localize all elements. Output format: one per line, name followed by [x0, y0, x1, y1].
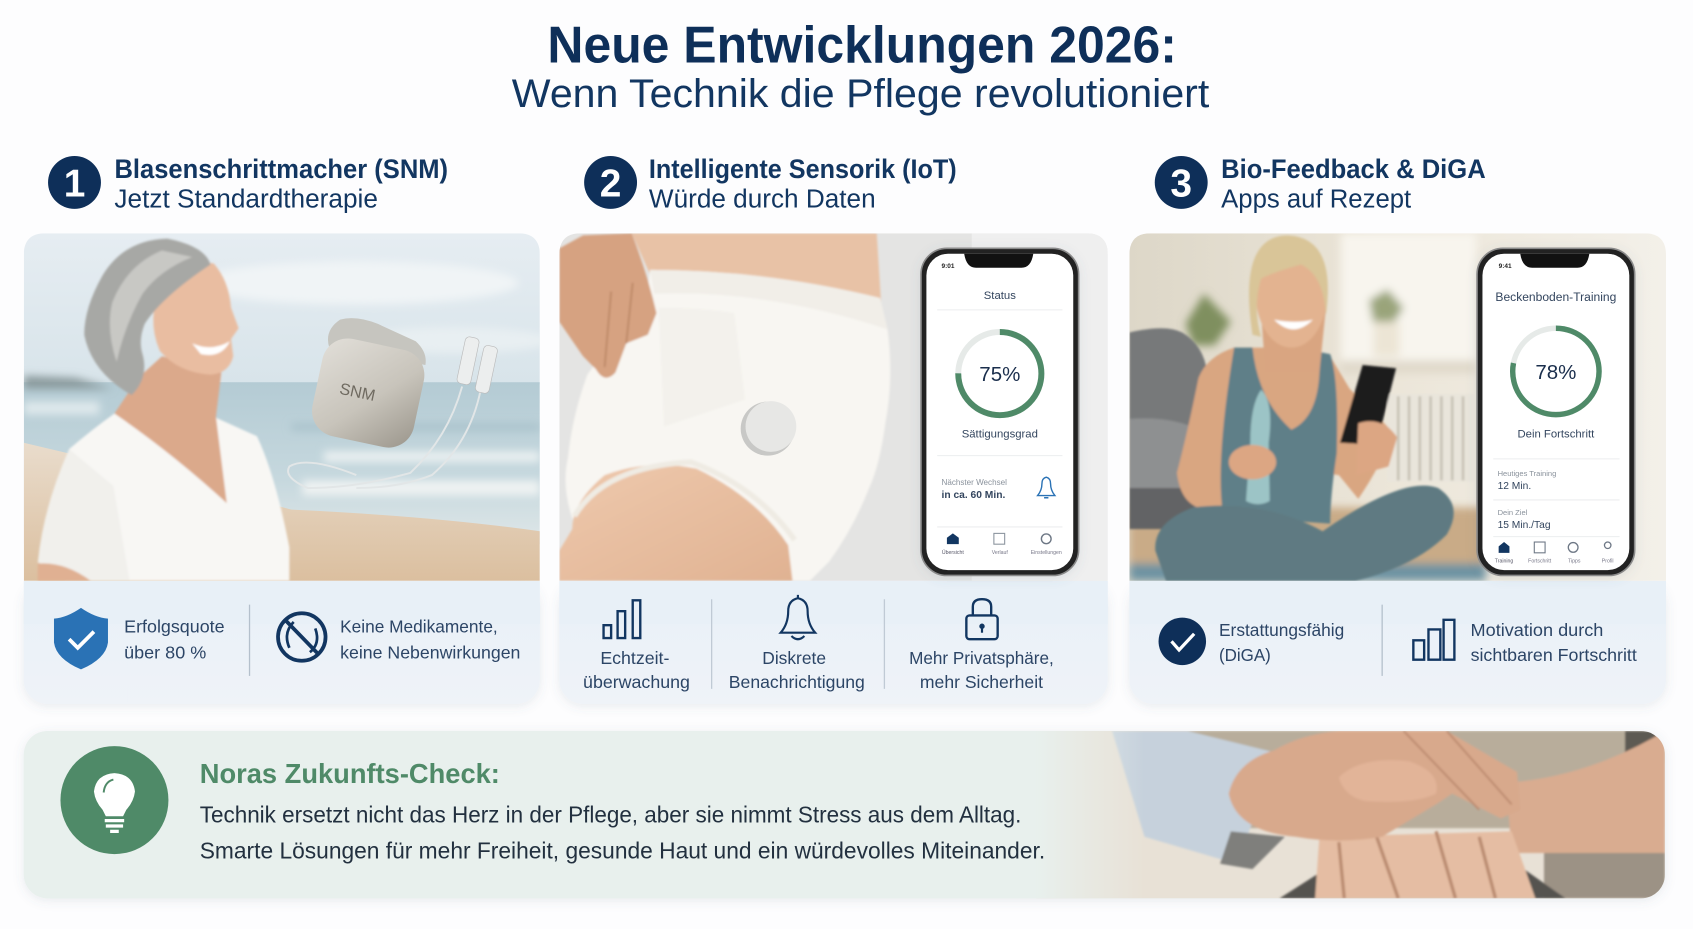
- feature: Benachrichtigung: Diskrete: [762, 648, 826, 668]
- feature: Erfolgsquote: Erfolgsquote: [124, 617, 225, 637]
- heading 3: Apps auf Rezept: [1221, 185, 1412, 213]
- title: Wenn Technik die Pflege revolutioniert: [512, 72, 1209, 116]
- panel: Noras Zukunfts-Check: [24, 731, 1665, 898]
- phone: Status: [921, 248, 1079, 575]
- number badge 1: [48, 156, 101, 209]
- photo: woman with biofeedback device and phone: [1129, 233, 1666, 581]
- phone: Status: Sättigungsgrad: [962, 428, 1038, 440]
- heading 2: Würde durch Daten: [649, 185, 876, 213]
- heading 1: Jetzt Standardtherapie: [114, 185, 378, 213]
- number badge 1: 1: [64, 163, 85, 206]
- heading 1: [114, 154, 448, 213]
- icon: light bulb: [60, 746, 168, 854]
- feature: Echtzeitüberwachung: überwachung: [583, 672, 690, 692]
- phone: Beckenboden-Training: Fortschritt: [1528, 559, 1552, 565]
- phone: Status: 9:01: [942, 263, 955, 270]
- feature: Privatsphäre: [909, 599, 1054, 692]
- feature: Erstattungsfähig: (DiGA): [1219, 645, 1271, 665]
- panel: Bio-Feedback & DiGA: [1129, 154, 1666, 704]
- phone: Beckenboden-Training: Dein Ziel: [1498, 508, 1528, 517]
- phone: Beckenboden-Training: Profil: [1602, 559, 1614, 565]
- callout text: Smarte Lösungen für mehr Freiheit, gesunde Haut und ein würdevolles Miteinander.: [200, 837, 1045, 863]
- number badge 3: 3: [1170, 163, 1192, 206]
- number badge 2: [584, 156, 637, 209]
- phone: Beckenboden-Training: Beckenboden-Training: [1495, 290, 1616, 304]
- phone: Status: Status: [984, 290, 1016, 302]
- number badge 2: 2: [600, 163, 621, 206]
- heading 2: Intelligente Sensorik (IoT): [649, 154, 957, 184]
- device: [288, 318, 498, 488]
- photo: woman at beach with SNM device: [24, 233, 551, 581]
- callout text: [200, 758, 1045, 863]
- heading 1: Blasenschrittmacher (SNM): [114, 154, 448, 184]
- progress ring 75%: [958, 332, 1041, 415]
- phone: Beckenboden-Training: 15 Min./Tag: [1498, 520, 1551, 531]
- progress ring 75%: 75%: [979, 363, 1020, 386]
- phone: Status: Einstellungen: [1031, 550, 1062, 556]
- progress ring 78%: [1513, 328, 1599, 415]
- feature: Echtzeitüberwachung: [583, 600, 690, 692]
- feature: Benachrichtigung: [729, 595, 865, 692]
- phone: Status: Nächster Wechsel: [942, 478, 1007, 487]
- feature: keine Medikamente: keine Nebenwirkungen: [340, 643, 520, 663]
- feature: keine Medikamente: [278, 613, 520, 663]
- photo: stacked hands: [1037, 731, 1665, 898]
- callout text: Noras Zukunfts-Check:: [200, 758, 500, 789]
- feature: Erstattungsfähig: [1159, 618, 1344, 665]
- feature: Privatsphäre: mehr Sicherheit: [920, 672, 1043, 692]
- photo: sensor on incontinence brief: [559, 233, 1108, 581]
- feature: Motivation: sichtbaren Fortschritt: [1471, 645, 1637, 665]
- panel: Intelligente Sensorik: [559, 154, 1108, 704]
- feature: Motivation: Motivation durch: [1471, 620, 1603, 640]
- phone: Beckenboden-Training: Training: [1495, 559, 1513, 565]
- phone: Status: Verlauf: [992, 550, 1008, 556]
- phone: Beckenboden-Training: [1477, 248, 1635, 575]
- feature: Echtzeitüberwachung: Echtzeit-: [600, 648, 669, 668]
- phone: Status: in ca. 60 Min.: [942, 490, 1005, 501]
- feature: Motivation: [1413, 620, 1637, 665]
- feature: Erfolgsquote: über 80 %: [124, 643, 206, 663]
- phone: Beckenboden-Training: 9:41: [1499, 263, 1512, 270]
- heading 3: [1221, 154, 1486, 213]
- phone: Beckenboden-Training: Dein Fortschritt: [1517, 428, 1595, 440]
- device: SNM: [338, 380, 377, 405]
- feature: Privatsphäre: Mehr Privatsphäre,: [909, 648, 1054, 668]
- panel: Blasenschrittmacher: [24, 154, 551, 704]
- heading 2: [649, 154, 957, 213]
- phone: Beckenboden-Training: Tipps: [1568, 559, 1581, 565]
- number badge 3: [1155, 156, 1208, 209]
- phone: Beckenboden-Training: 12 Min.: [1498, 481, 1531, 492]
- title: [512, 16, 1209, 116]
- phone: Beckenboden-Training: Heutiges Training: [1498, 469, 1556, 478]
- title: Neue Entwicklungen 2026:: [547, 16, 1177, 74]
- heading 3: Bio-Feedback & DiGA: [1221, 154, 1486, 184]
- feature: Benachrichtigung: Benachrichtigung: [729, 672, 865, 692]
- phone: Status: Übersicht: [942, 549, 964, 556]
- feature: keine Medikamente: Keine Medikamente,: [340, 617, 498, 637]
- progress ring 78%: 78%: [1535, 361, 1576, 384]
- feature: Erfolgsquote: [54, 608, 225, 669]
- callout text: Technik ersetzt nicht das Herz in der Pflege, aber sie nimmt Stress aus dem Alltag.: [200, 802, 1021, 828]
- feature: Erstattungsfähig: Erstattungsfähig: [1219, 620, 1344, 640]
